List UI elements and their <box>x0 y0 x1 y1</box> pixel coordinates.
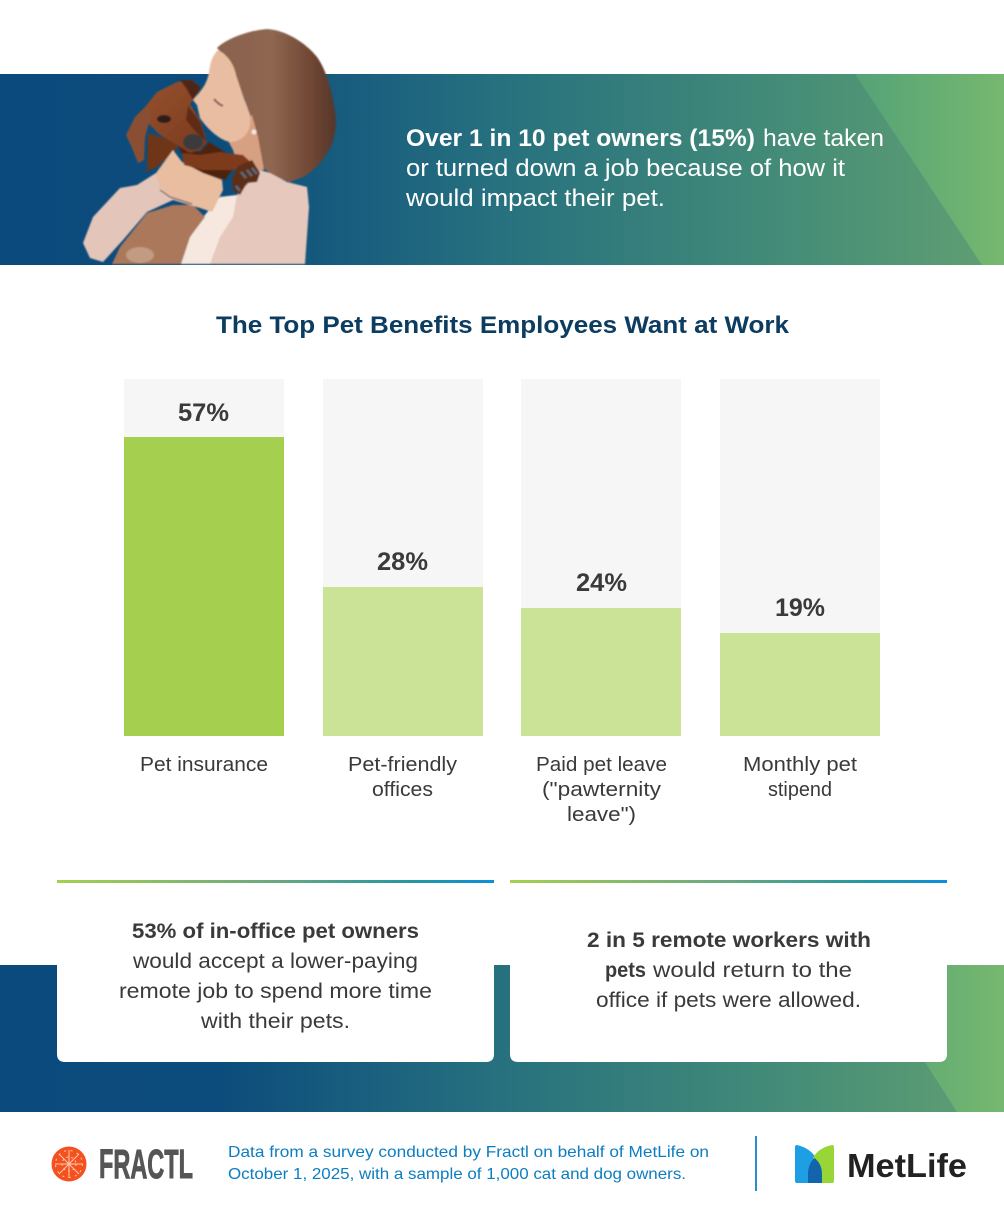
card: in-office pet owners: 53% of in-office pet owners <box>132 920 419 943</box>
bar: monthly pet stipend 19%: 19% <box>775 594 825 622</box>
card: remote workers: pets <box>605 959 646 982</box>
dog's chest <box>143 133 178 173</box>
hero statement: would impact their pet. <box>405 185 665 212</box>
icon: MetLife mark <box>795 1145 834 1183</box>
white top under sweater <box>181 195 237 264</box>
card: in-office pet owners: remote job to spend more time <box>119 980 432 1003</box>
chart title: The Top Pet Benefits Employees Want at Work <box>216 312 790 339</box>
tattoo <box>160 190 192 204</box>
source note: October 1, 2025, with a sample of 1,000 cat and dog owners. <box>228 1166 686 1183</box>
paw claws <box>236 168 257 191</box>
bar: pet-friendly offices 28%: offices <box>372 779 433 801</box>
dog's neck <box>178 142 240 180</box>
lower gradient band <box>0 965 1004 1112</box>
bar: monthly pet stipend 19%: Monthly pet <box>743 754 857 776</box>
bar: monthly pet stipend 19%: stipend <box>768 779 832 801</box>
card: remote workers: 2 in 5 remote workers with <box>587 929 871 952</box>
woman's face <box>193 50 250 142</box>
bar: paid pet leave 24%: 24% <box>576 569 627 597</box>
dog's muzzle shade <box>186 106 206 142</box>
card: in-office pet owners: would accept a lower-paying <box>132 950 418 973</box>
hero statement: or turned down a job because of how it <box>406 155 845 182</box>
card: in-office pet owners: with their pets. <box>200 1010 350 1033</box>
sweater <box>181 170 309 264</box>
closed eye <box>214 99 223 106</box>
bar chart <box>124 379 880 826</box>
dog's nose <box>183 134 203 150</box>
woman's neck <box>225 115 264 172</box>
bar: paid pet leave 24%: Paid pet leave <box>536 754 667 776</box>
bar: pet insurance 57%: 57% <box>178 399 229 427</box>
dog's ear <box>126 107 152 163</box>
arm highlight <box>126 247 154 263</box>
bar: pet-friendly offices 28% <box>323 379 483 801</box>
bar: pet-friendly offices 28%: Pet-friendly <box>348 754 457 776</box>
MetLife wordmark: MetLife <box>847 1147 967 1184</box>
dog's head <box>145 80 207 153</box>
hero statement: have taken <box>763 125 884 152</box>
card: remote workers <box>510 880 947 1062</box>
dog's ear flap <box>180 80 201 100</box>
card: remote workers: would return to the <box>652 959 852 982</box>
icon: Fractl snowflake <box>52 1146 86 1182</box>
Fractl wordmark: FRACTL <box>99 1141 193 1187</box>
woman's hair <box>217 29 336 182</box>
bar: paid pet leave 24%: ("pawternity <box>542 779 661 801</box>
bar: pet-friendly offices 28%: 28% <box>377 548 428 576</box>
dog's eye <box>157 115 171 123</box>
bar: pet insurance 57% <box>124 379 284 776</box>
hero banner <box>0 74 1004 265</box>
bar: paid pet leave 24%: leave") <box>567 804 636 826</box>
card: in-office pet owners <box>57 880 494 1062</box>
card: remote workers: office if pets were allowed. <box>596 989 861 1012</box>
hero statement: Over 1 in 10 pet owners (15%) <box>406 125 755 152</box>
hero statement <box>405 125 884 212</box>
source note <box>228 1144 709 1183</box>
bar: pet insurance 57%: Pet insurance <box>140 754 268 776</box>
hand <box>156 150 223 212</box>
earring <box>252 130 256 134</box>
dog's front leg <box>182 152 255 170</box>
photo: woman kissing dachshund <box>83 29 336 264</box>
bar: monthly pet stipend 19% <box>720 379 880 801</box>
Fractl logo <box>52 1141 193 1187</box>
sleeve <box>83 173 173 262</box>
source note: Data from a survey conducted by Fractl on behalf of MetLife on <box>228 1144 709 1161</box>
MetLife logo <box>795 1145 967 1184</box>
bar: paid pet leave 24% <box>521 379 681 826</box>
dog's paw <box>232 160 260 195</box>
lower arm <box>112 205 205 264</box>
